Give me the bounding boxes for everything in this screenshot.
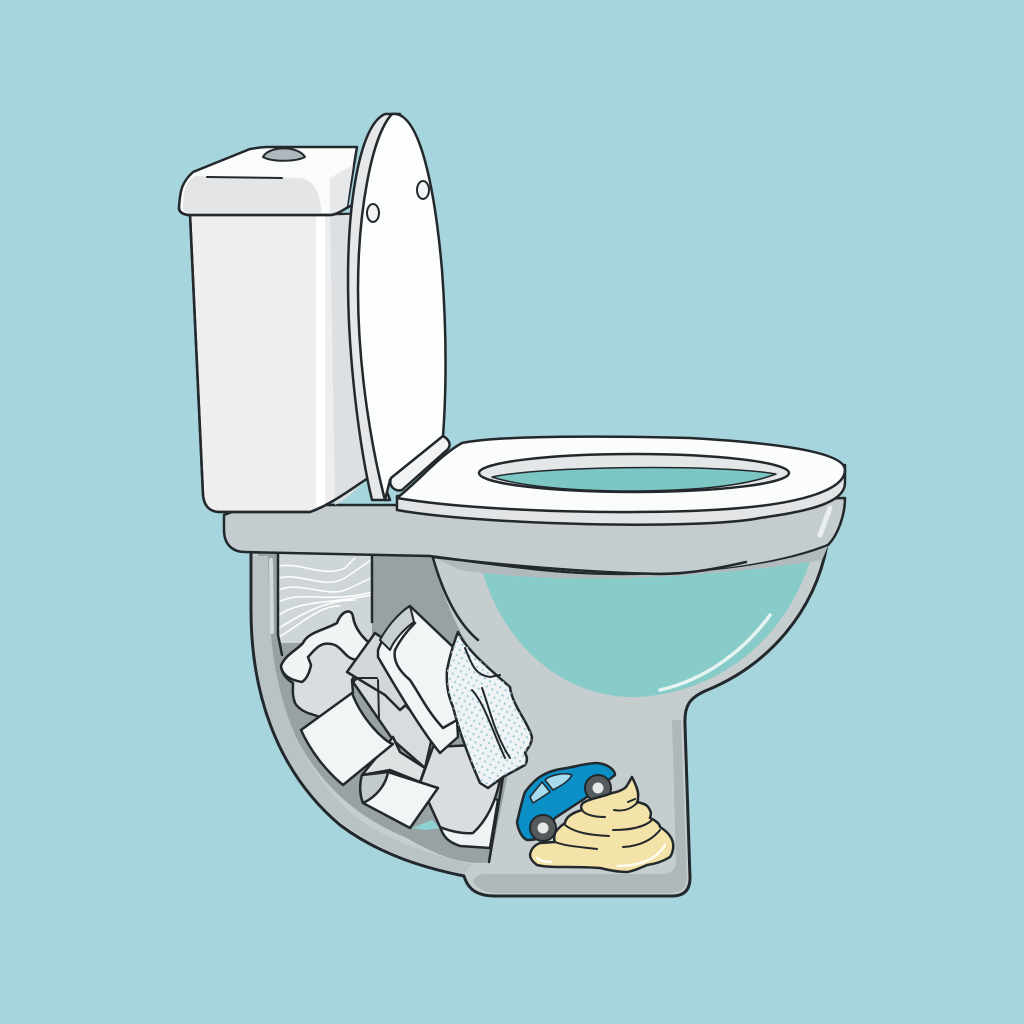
pipe dark interior [258, 552, 520, 863]
seat opening [479, 454, 789, 492]
seat edge [397, 465, 845, 525]
rim underside shade [433, 546, 828, 579]
grey folded wipe [347, 633, 415, 710]
mid grey crumple [353, 670, 433, 768]
tank body [190, 214, 368, 512]
toilet seat [397, 437, 845, 525]
tank highlight [316, 216, 325, 506]
large roll [301, 693, 393, 785]
gap of teal [412, 820, 440, 830]
cloth grey band [380, 606, 414, 650]
tank front outline [190, 214, 368, 512]
lid bottom outline [179, 205, 352, 215]
folded white cloth [378, 606, 458, 753]
seat opening water [492, 468, 776, 491]
crumpled rag top left [281, 611, 372, 717]
cloth inner fold [395, 650, 457, 728]
toilet bowl body [251, 545, 827, 896]
car wheels [530, 815, 556, 841]
rim highlight [820, 508, 830, 535]
dotted wipe base [447, 632, 532, 788]
raised seat lid [348, 114, 450, 500]
divider wall lines [489, 777, 503, 862]
lid front face [358, 114, 446, 500]
lid shading [183, 176, 321, 213]
rag white top [281, 611, 372, 682]
shell highlight [271, 560, 272, 632]
dotted wipe texture [447, 632, 532, 788]
lid bumpers [367, 204, 379, 222]
grey wipe fold lines [358, 678, 379, 718]
car windows [530, 782, 550, 803]
bowl outer shell and trap [251, 545, 827, 896]
rim under seat [224, 498, 845, 579]
lid side edge [348, 114, 400, 500]
large grey crumple lower [420, 745, 500, 833]
lid line [207, 177, 282, 178]
tank shadow side [330, 214, 368, 505]
lid side shade [330, 165, 353, 214]
wipes and debris clog [281, 606, 532, 862]
bowl water [481, 555, 812, 697]
water wave panel [278, 553, 372, 643]
water highlight [660, 615, 770, 690]
pipe inner shell highlight [253, 556, 472, 874]
water wave lines [279, 558, 372, 637]
toy car [517, 763, 615, 841]
rim outline underside [433, 557, 746, 574]
pipe inner wall lines [278, 553, 282, 655]
poop swirl lines [555, 799, 660, 849]
dotted wipe folds [465, 648, 510, 758]
roll lower [360, 772, 388, 803]
bottom wipe [440, 790, 498, 848]
hinge [390, 436, 450, 490]
seat top [397, 437, 845, 512]
cistern tank [179, 147, 368, 512]
poop highlights [617, 845, 665, 866]
flush button [263, 148, 305, 161]
poop pile [530, 777, 673, 872]
tank lid [179, 147, 357, 215]
middle fold [362, 737, 425, 782]
lower shading on base [473, 720, 687, 893]
